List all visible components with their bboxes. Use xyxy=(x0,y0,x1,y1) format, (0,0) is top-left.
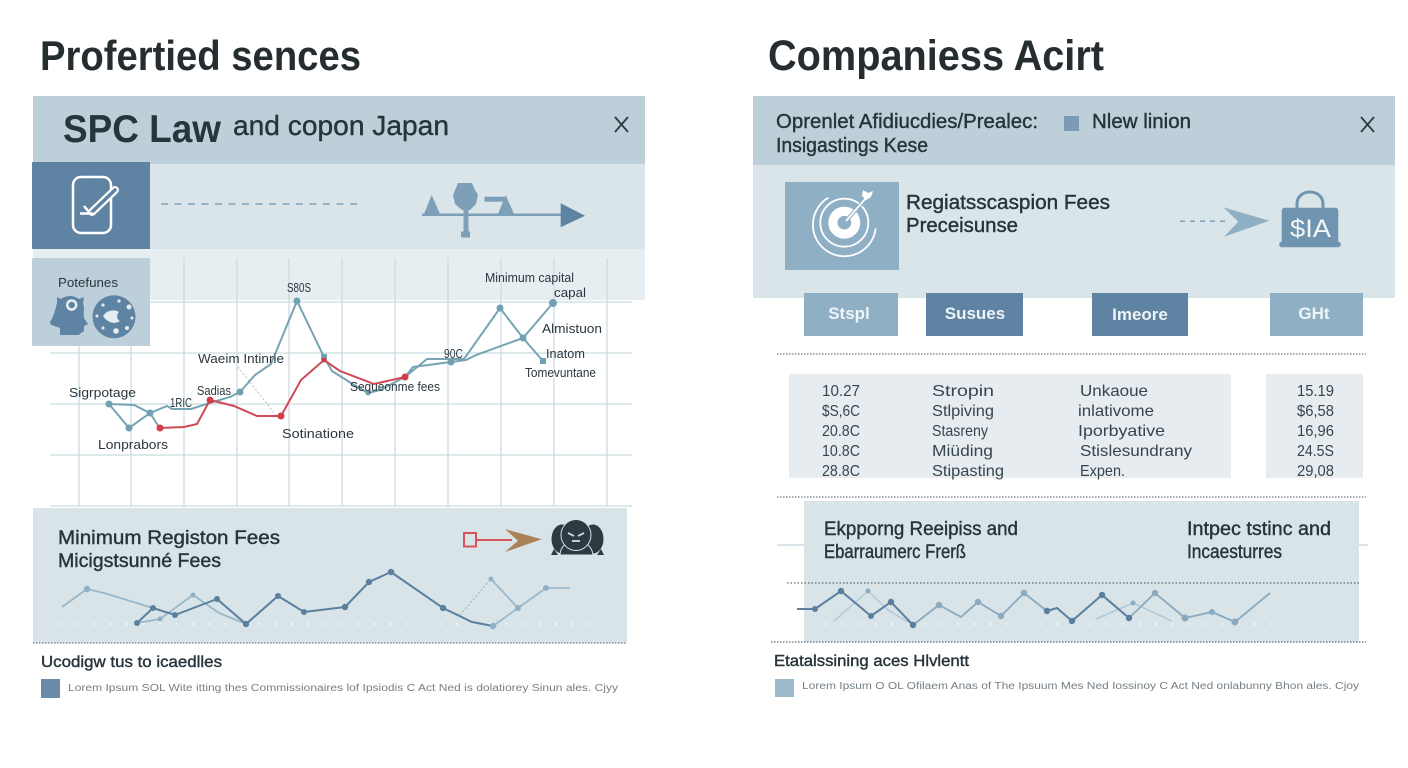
text: exploring heading xyxy=(824,519,1018,563)
table: side values: 15.19 xyxy=(1297,383,1334,400)
chart: right mini line chart xyxy=(797,588,1282,628)
table: main: Stropin xyxy=(932,383,994,400)
panel: right lower xyxy=(777,501,1368,642)
panel: left header band xyxy=(33,96,645,164)
panel: left pale band xyxy=(33,249,645,300)
table: main xyxy=(789,374,1231,480)
heading: and copon Japan: and copon Japan xyxy=(233,110,449,141)
chart labels: 1RIC xyxy=(170,395,192,410)
text: header lines xyxy=(776,111,1038,157)
text: registration fees: Preceisunse xyxy=(906,215,1018,237)
text: panel heading: Minimum Registon Fees xyxy=(58,528,280,549)
panel: minimum registration fees xyxy=(33,508,627,643)
text: impact heading: Incaesturres xyxy=(1187,542,1282,563)
table: side values: 16,96 xyxy=(1297,423,1334,440)
legend: left note xyxy=(41,679,618,698)
panel: right registration band xyxy=(753,165,1395,298)
chart labels: Waeim Intinrie xyxy=(198,351,284,366)
data points xyxy=(106,298,557,432)
heading: right note: Etatalssining aces Hlvlentt xyxy=(774,653,970,670)
chart labels: Minimum capital xyxy=(485,270,574,285)
button: susues: Susues xyxy=(945,304,1005,323)
text: exploring heading: Ekpporng Reeipiss and xyxy=(824,519,1018,540)
arrow: red box to brown head xyxy=(464,529,542,552)
icon: target xyxy=(785,182,899,270)
table: main: 10.8C xyxy=(822,443,860,460)
text: header lines: Oprenlet Afidiucdies/Prealec: xyxy=(776,111,1038,133)
chart labels: Sequeonme fees xyxy=(350,379,440,394)
legend: right note: Lorem Ipsum O OL Ofilaem Anas of The Ipsuum Mes Ned Iossinoy C Act Ned onlabunny Bhon ales. Cjoy xyxy=(802,681,1359,692)
panel: right header band xyxy=(753,96,1395,165)
table: main: Stasreny xyxy=(932,423,988,440)
icon: close xyxy=(1361,117,1374,132)
icon: disc xyxy=(92,295,136,338)
table: side values xyxy=(1266,374,1363,480)
text: exploring heading: Ebarraumerc Frerß xyxy=(824,542,966,563)
chart: mini line chart xyxy=(60,569,606,629)
table: main: inlativome xyxy=(1078,403,1154,420)
icon: price bag: $IA xyxy=(1290,215,1331,243)
icon: close xyxy=(615,117,628,132)
icon: price bag xyxy=(1279,192,1341,247)
table: main: $S,6C xyxy=(822,403,860,420)
table: main: 28.8C xyxy=(822,463,860,480)
button: stspl: Stspl xyxy=(828,304,870,323)
text: panel heading: Micigstsunné Fees xyxy=(58,551,221,572)
button: stspl xyxy=(804,293,898,336)
legend: right note xyxy=(775,679,1359,697)
red series xyxy=(160,360,405,428)
table: side values: $6,58 xyxy=(1297,403,1334,420)
panel: potentials xyxy=(32,258,150,346)
heading: left note: Ucodigw tus to icaedlles xyxy=(41,654,222,671)
chart: main line chart xyxy=(50,258,632,506)
dashed guide xyxy=(238,367,280,420)
divider: right dotted xyxy=(777,353,1366,355)
text: registration fees xyxy=(906,192,1110,237)
text: panel heading xyxy=(58,528,280,572)
table: side values: 24.5S xyxy=(1297,443,1334,460)
teal series xyxy=(109,301,553,428)
table: main: Iporbyative xyxy=(1078,423,1165,440)
arrow: dashed to bag xyxy=(1180,207,1269,237)
icon: scale with arrow xyxy=(422,183,585,238)
chart labels: Sadias xyxy=(197,383,231,398)
title: right: Companiess Acirt xyxy=(768,32,1104,80)
icon: dark face xyxy=(551,520,604,555)
text: impact heading: Intpec tstinc and xyxy=(1187,519,1331,540)
icon: clipboard check xyxy=(32,162,150,249)
button: susues xyxy=(926,293,1023,336)
chart labels: Tomevuntane xyxy=(525,365,596,380)
button: imeore: Imeore xyxy=(1112,305,1168,324)
table: main: 10.27 xyxy=(822,383,860,400)
button: GHt: GHt xyxy=(1298,304,1330,323)
divider: left dotted xyxy=(33,642,627,644)
chart labels: Inatom xyxy=(546,346,585,361)
legend: new item: Nlew linion xyxy=(1092,111,1191,133)
chart labels: Sigrpotage xyxy=(69,385,136,400)
table: main: Stipasting xyxy=(932,463,1004,480)
table: main: 20.8C xyxy=(822,423,860,440)
chart labels: Lonprabors xyxy=(98,437,169,452)
legend: left note: Lorem Ipsum SOL Wite itting thes Commissionaires lof Ipsiodis C Act Ned is dolatiorey Sinun ales. Cjyy xyxy=(68,683,618,694)
text: impact heading xyxy=(1187,519,1331,563)
chart labels xyxy=(69,270,602,452)
title: left: Profertied sences xyxy=(40,32,361,79)
panel: left process band xyxy=(32,162,645,249)
divider: upper dotted xyxy=(777,496,1366,498)
table: main: Miüding xyxy=(932,443,993,460)
table: side values: 29,08 xyxy=(1297,463,1334,480)
button: imeore xyxy=(1092,293,1188,336)
table: main: Expen. xyxy=(1080,463,1125,480)
chart labels: capal xyxy=(554,285,586,300)
chart labels: Sotinatione xyxy=(282,426,354,441)
chart labels: 90C xyxy=(444,346,463,361)
chart labels: Almistuon xyxy=(542,321,602,336)
icon: head xyxy=(50,296,88,335)
button: GHt xyxy=(1270,293,1363,336)
table: main: Stislesundrany xyxy=(1080,443,1192,460)
divider: lower dotted xyxy=(771,641,1366,643)
dashed connector xyxy=(161,203,363,205)
heading: SPC Law: SPC Law xyxy=(63,108,222,151)
text: registration fees: Regiatsscaspion Fees xyxy=(906,192,1110,214)
table: main: Unkaoue xyxy=(1080,383,1148,400)
chart labels: S80S xyxy=(287,280,311,295)
table: main: Stlpiving xyxy=(932,403,994,420)
label: potentials: Potefunes xyxy=(58,275,119,290)
text: header lines: Insigastings Kese xyxy=(776,135,928,157)
